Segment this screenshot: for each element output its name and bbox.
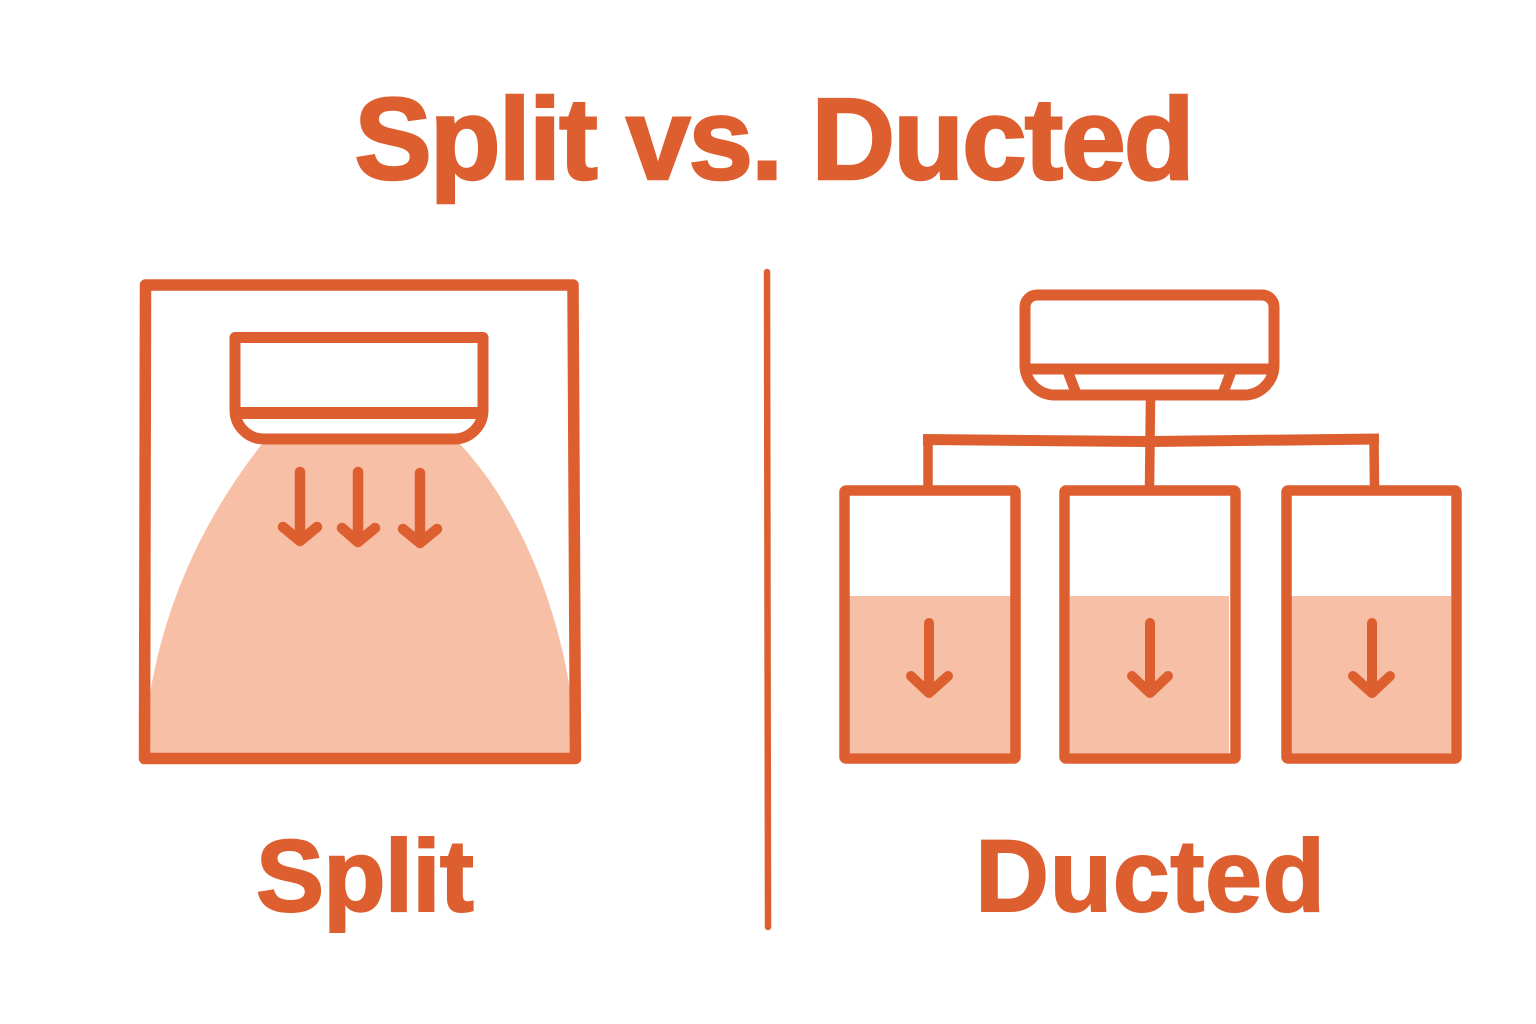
indoor unit [235, 338, 483, 439]
ducted indoor unit [1025, 295, 1274, 395]
arrow room 1 [911, 623, 948, 693]
room 2 [1064, 490, 1236, 758]
divider [767, 272, 768, 927]
title: Split vs. Ducted [354, 74, 1193, 204]
room outline [144, 285, 576, 758]
label: split: Split [256, 819, 473, 933]
panel: split system diagram [144, 285, 576, 758]
arrow room 2 [1132, 623, 1168, 693]
label: ducted: Ducted [975, 819, 1326, 933]
duct network [923, 398, 1379, 488]
room 1 [844, 490, 1016, 758]
arrow room 3 [1353, 623, 1390, 693]
panel: ducted system diagram [844, 295, 1456, 758]
airflow arrows [283, 472, 437, 543]
cool air cone [149, 444, 570, 753]
room 3 [1286, 490, 1456, 758]
